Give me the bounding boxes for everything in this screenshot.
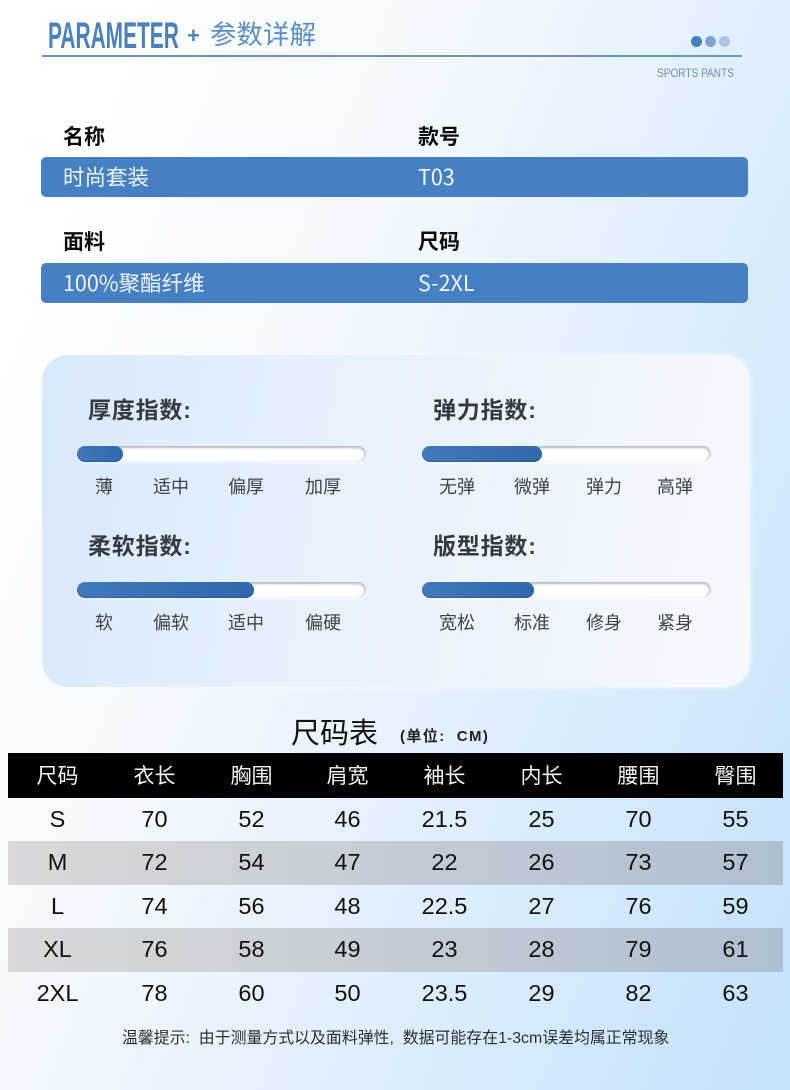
- row: L: 48: [334, 893, 361, 919]
- options: [95, 477, 341, 497]
- heading: size chart title: [291, 718, 489, 750]
- row: 2XL: 29: [528, 980, 555, 1006]
- row: L: [51, 893, 749, 919]
- unit note: (单位: CM): [400, 728, 489, 745]
- options: 加厚: [305, 477, 341, 497]
- slider: fit: [422, 582, 711, 598]
- row: L: 59: [722, 893, 749, 919]
- row: S: 25: [528, 806, 555, 832]
- text: SPORTS PANTS: SPORTS PANTS: [657, 66, 734, 80]
- options: 偏厚: [228, 477, 264, 497]
- options: 微弹: [514, 477, 550, 497]
- row: M: 54: [238, 849, 265, 875]
- value: S-2XL: S-2XL: [418, 267, 475, 298]
- options: [439, 613, 693, 633]
- softness index: [76, 533, 366, 633]
- row: S: [50, 806, 749, 832]
- row: XL: 23: [431, 936, 458, 962]
- options: 适中: [228, 613, 264, 633]
- row: S: 21.5: [422, 806, 467, 832]
- heading: 版型指数: 版型指数:: [433, 533, 537, 559]
- table: size chart: [8, 753, 783, 1006]
- table header: 臀围: [714, 765, 756, 788]
- options: 适中: [153, 477, 189, 497]
- label: 面料: 面料: [63, 226, 105, 256]
- options: 薄: [95, 477, 113, 497]
- table header: 胸围: [230, 765, 272, 788]
- options: 宽松: [439, 613, 475, 633]
- options: 修身: [586, 613, 622, 633]
- slider: thickness: [77, 446, 366, 462]
- heading: 厚度指数: 厚度指数:: [88, 397, 192, 423]
- table header: 肩宽: [326, 765, 368, 788]
- options: 紧身: [657, 613, 693, 633]
- row: 2XL: 2XL: [37, 980, 78, 1006]
- row: L: 76: [625, 893, 652, 919]
- row: XL: 49: [334, 936, 361, 962]
- table header: 袖长: [424, 765, 466, 788]
- options: [439, 477, 693, 497]
- value: 100%聚酯纤维: 100%聚酯纤维: [63, 267, 205, 298]
- title: 尺码表: 尺码表: [291, 718, 378, 750]
- row: S: 70: [141, 806, 168, 832]
- heading: PARAMETER: PARAMETER: [48, 15, 179, 56]
- row: L: 74: [141, 893, 168, 919]
- options: 弹力: [586, 477, 622, 497]
- panel: name and style values: [41, 157, 748, 197]
- row: XL: 28: [528, 936, 555, 962]
- elasticity index: [422, 397, 711, 497]
- options: 高弹: [657, 477, 693, 497]
- row: S: 52: [238, 806, 265, 832]
- table header: 内长: [520, 765, 562, 788]
- row: S: 46: [334, 806, 361, 832]
- heading: 柔软指数: 柔软指数:: [88, 533, 192, 559]
- row: 2XL: 60: [238, 980, 265, 1006]
- value: T03: T03: [418, 161, 455, 192]
- row: XL: [8, 928, 783, 972]
- row: XL: 58: [238, 936, 265, 962]
- heading: 弹力指数: 弹力指数:: [433, 397, 537, 423]
- options: 偏硬: [305, 613, 341, 633]
- row: 2XL: 50: [334, 980, 361, 1006]
- table header: 尺码: [36, 765, 78, 788]
- table header: 衣长: [134, 765, 176, 788]
- row: XL: XL: [43, 936, 72, 962]
- heading: Chinese subtitle: 参数详解: [210, 20, 316, 50]
- row: M: 73: [625, 849, 652, 875]
- slider: softness: [77, 582, 366, 598]
- row: L: 22.5: [422, 893, 467, 919]
- label: 款号: 款号: [418, 121, 460, 151]
- text: footnote: 温馨提示: 由于测量方式以及面料弹性, 数据可能存在1-3cm误差均属正常现象: [122, 1030, 669, 1047]
- row: L: 56: [238, 893, 265, 919]
- row: M: 22: [431, 849, 458, 875]
- table header: [8, 753, 783, 798]
- options: 无弹: [439, 477, 475, 497]
- heading: plus sign: +: [187, 23, 200, 48]
- row: 2XL: 78: [141, 980, 168, 1006]
- row: 2XL: [37, 980, 749, 1006]
- options: 偏软: [153, 613, 189, 633]
- icon: three dots: [691, 36, 730, 47]
- row: M: 57: [722, 849, 749, 875]
- row: S: 70: [625, 806, 652, 832]
- row: S: S: [50, 806, 65, 832]
- row: S: 55: [722, 806, 749, 832]
- row: M: [8, 841, 783, 885]
- row: L: L: [51, 893, 64, 919]
- slider: elasticity: [422, 446, 711, 462]
- row: XL: 61: [722, 936, 749, 962]
- row: M: 72: [141, 849, 168, 875]
- row: XL: 76: [141, 936, 168, 962]
- label: 尺码: 尺码: [418, 226, 460, 256]
- row: L: 27: [528, 893, 555, 919]
- header rule: [42, 55, 742, 57]
- row: 2XL: 23.5: [422, 980, 467, 1006]
- header: [42, 15, 742, 80]
- row: 2XL: 82: [625, 980, 652, 1006]
- options: 标准: [514, 613, 550, 633]
- thickness index: [76, 397, 366, 497]
- panel: fabric and size values: [41, 263, 748, 303]
- fit index: [422, 533, 711, 633]
- options: [95, 613, 341, 633]
- panel: index card: [42, 355, 750, 687]
- value: 时尚套装: 时尚套装: [63, 161, 149, 192]
- table header: 腰围: [618, 765, 660, 788]
- label: 名称: 名称: [63, 121, 105, 151]
- row: M: M: [48, 849, 67, 875]
- row: M: 26: [528, 849, 555, 875]
- row: 2XL: 63: [722, 980, 749, 1006]
- row: M: 47: [334, 849, 361, 875]
- options: 软: [95, 613, 113, 633]
- row: XL: 79: [625, 936, 652, 962]
